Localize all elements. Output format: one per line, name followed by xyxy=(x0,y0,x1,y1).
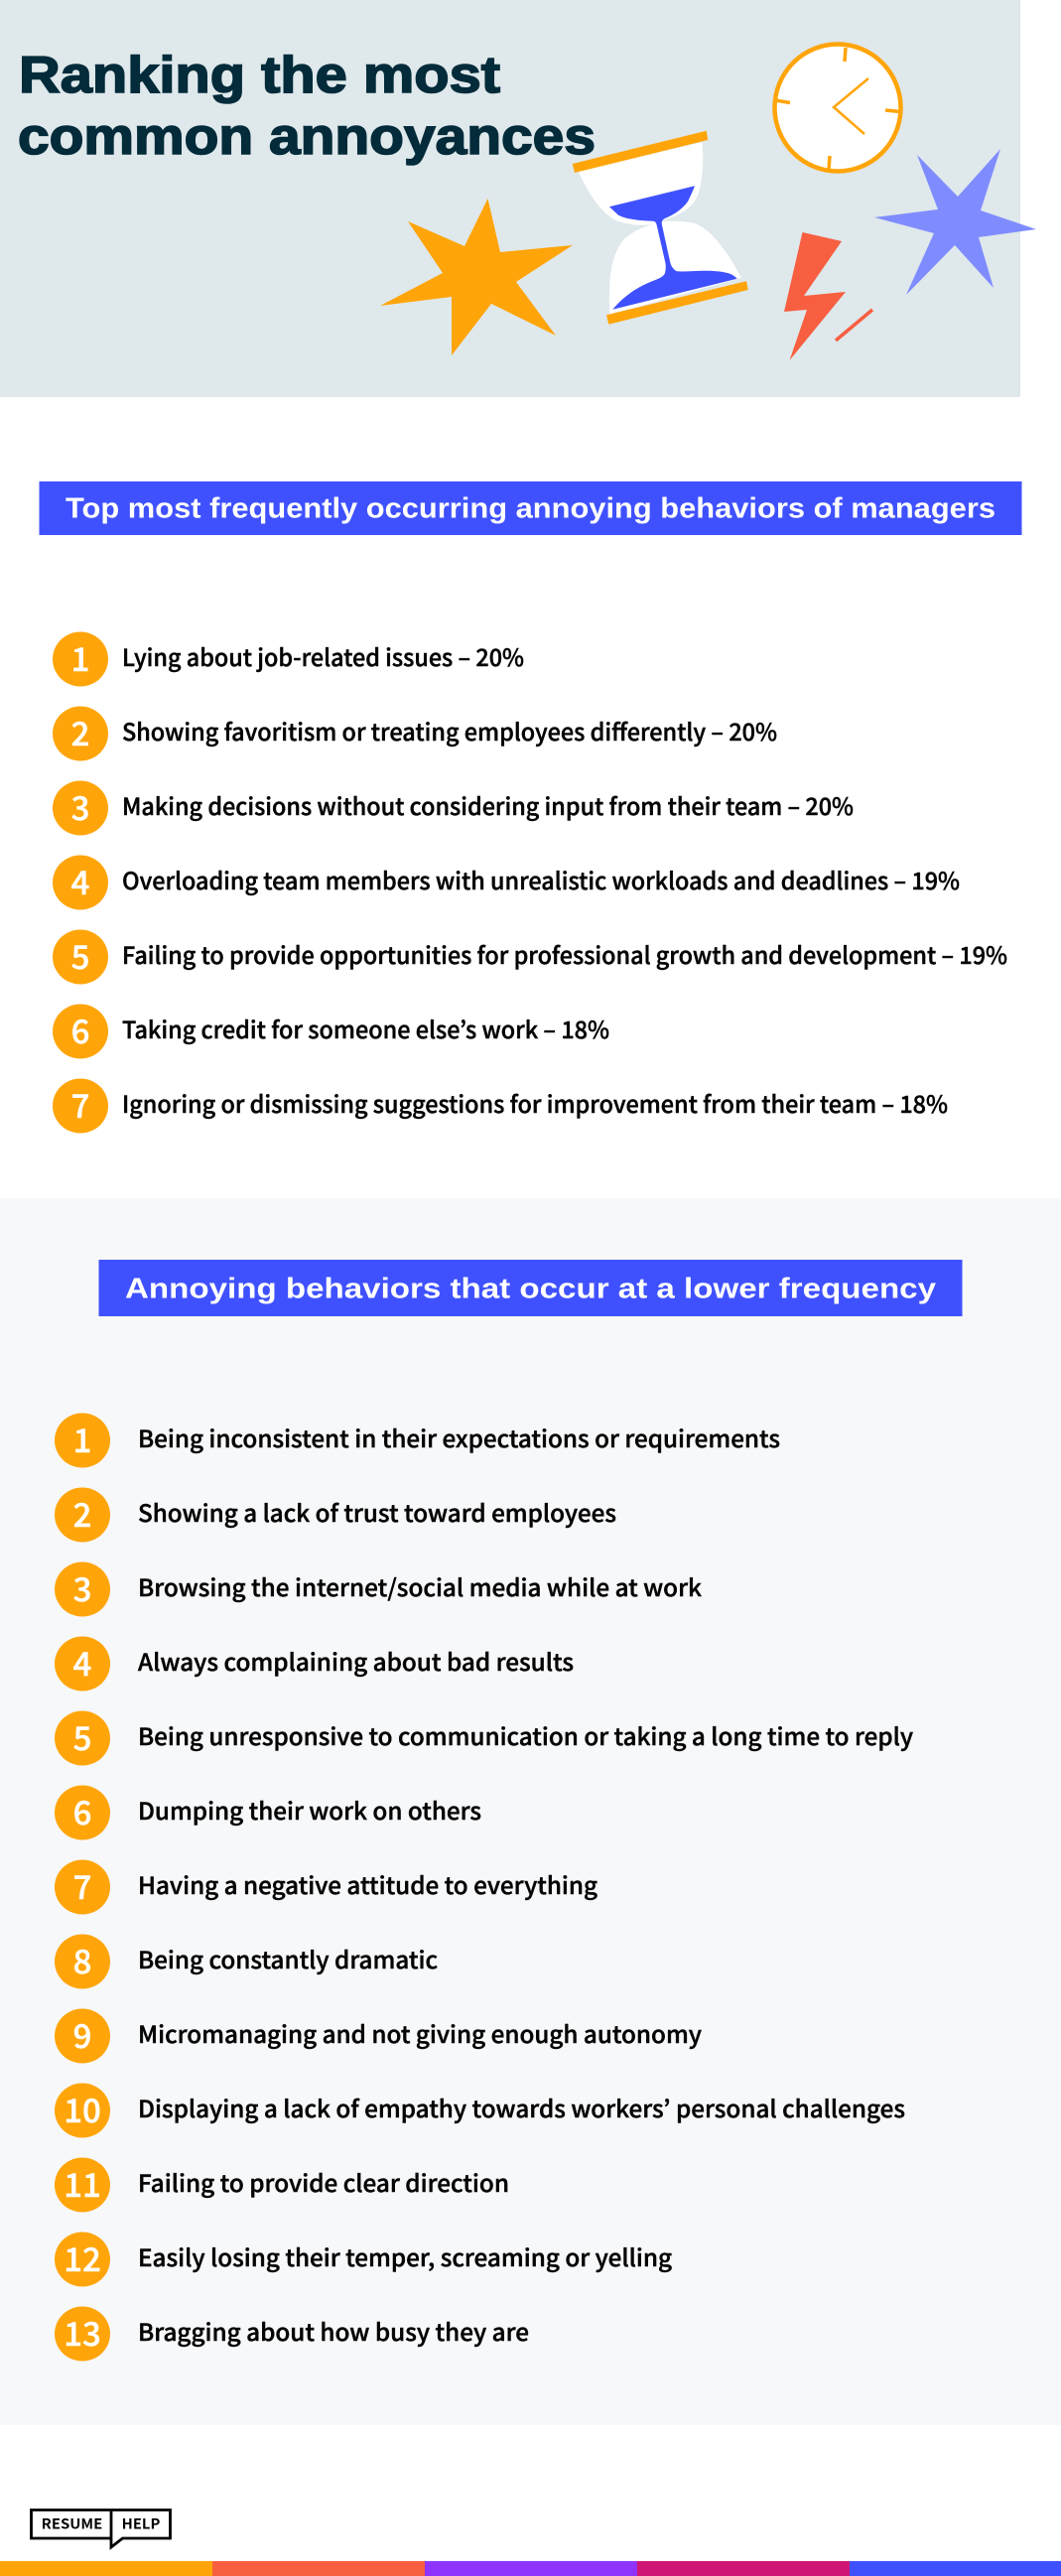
title xyxy=(18,47,596,166)
item 11: 11 xyxy=(64,2159,101,2207)
item 7: 7 xyxy=(71,1080,89,1128)
item 5: Failing to provide opportunities for professional growth and development – 19% xyxy=(122,936,1007,971)
item 10 xyxy=(55,2083,905,2138)
item 1: Lying about job-related issues – 20% xyxy=(122,638,524,673)
item 8 xyxy=(55,1934,438,1989)
item 7: Having a negative attitude to everything xyxy=(138,1866,597,1901)
icon: hourglass xyxy=(573,131,748,325)
item 11: Failing to provide clear direction xyxy=(138,2164,509,2199)
item 7: Ignoring or dismissing suggestions for improvement from their team – 18% xyxy=(122,1085,948,1120)
logo: Resume Help xyxy=(32,2509,171,2547)
item 1 xyxy=(55,1414,780,1467)
title: common annoyances xyxy=(18,108,596,166)
item 2: Showing favoritism or treating employees differently – 20% xyxy=(122,713,777,747)
item 3: Making decisions without considering input from their team – 20% xyxy=(122,787,854,822)
item 5: 5 xyxy=(71,931,89,979)
item 2: Showing a lack of trust toward employees xyxy=(138,1494,616,1529)
item 13: 13 xyxy=(64,2308,101,2356)
item 4 xyxy=(55,1636,574,1692)
item 7 xyxy=(53,1078,948,1134)
item 4: Always complaining about bad results xyxy=(138,1643,574,1678)
item 4 xyxy=(53,856,960,909)
heading: top behaviors: Top most frequently occurring annoying behaviors of managers xyxy=(66,492,995,524)
icon: clock xyxy=(774,44,901,171)
item 4: Overloading team members with unrealistic workloads and deadlines – 19% xyxy=(122,862,960,896)
item 5: Being unresponsive to communication or taking a long time to reply xyxy=(138,1717,913,1752)
item 12 xyxy=(55,2232,672,2287)
heading: lower frequency behaviors: Annoying behaviors that occur at a lower frequency xyxy=(125,1273,936,1304)
item 6: 6 xyxy=(71,1006,89,1053)
item 2 xyxy=(53,707,777,760)
item 2: 2 xyxy=(71,708,89,755)
item 6: Taking credit for someone else’s work – 18% xyxy=(122,1011,609,1045)
logo: Resume Help: HELP xyxy=(122,2514,160,2534)
item 3 xyxy=(55,1562,702,1616)
item 1: 1 xyxy=(71,633,89,681)
item 12: Easily losing their temper, screaming or yelling xyxy=(138,2238,672,2273)
item 11 xyxy=(55,2158,509,2212)
item 3: Browsing the internet/social media while at work xyxy=(138,1568,702,1603)
item 9 xyxy=(55,2009,702,2063)
panel: header xyxy=(0,0,1036,397)
item 4: 4 xyxy=(71,857,89,904)
item 8: 8 xyxy=(73,1936,91,1983)
item 6: 6 xyxy=(73,1787,91,1834)
logo: Resume Help: RESUME xyxy=(42,2514,102,2534)
item 6 xyxy=(53,1005,609,1058)
item 6: Dumping their work on others xyxy=(138,1792,481,1827)
item 7 xyxy=(55,1860,597,1914)
list: most frequent behaviors xyxy=(53,631,1007,1134)
item 13: Bragging about how busy they are xyxy=(138,2313,529,2348)
item 12: 12 xyxy=(64,2234,101,2281)
item 9: 9 xyxy=(73,2010,91,2058)
item 5 xyxy=(55,1711,913,1765)
icon: orange star xyxy=(380,199,573,355)
panel: lower frequency xyxy=(0,1198,1061,2425)
item 8: Being constantly dramatic xyxy=(138,1941,438,1975)
icon: periwinkle star xyxy=(874,149,1036,295)
item 2: 2 xyxy=(73,1489,91,1537)
item 5 xyxy=(53,929,1007,985)
item 1: 1 xyxy=(73,1415,91,1462)
item 7: 7 xyxy=(73,1861,91,1909)
heading: top behaviors xyxy=(40,481,1022,535)
item 4: 4 xyxy=(73,1638,91,1686)
icon: lightning bolt xyxy=(784,232,872,360)
item 13 xyxy=(55,2307,529,2361)
item 10: Displaying a lack of empathy towards workers’ personal challenges xyxy=(138,2090,905,2124)
item 1: Being inconsistent in their expectations or requirements xyxy=(138,1420,780,1454)
title: Ranking the most xyxy=(19,47,500,104)
footer color bar xyxy=(0,2561,1061,2576)
item 10: 10 xyxy=(64,2085,101,2132)
item 3: 3 xyxy=(71,782,89,830)
item 3 xyxy=(53,780,854,836)
item 9: Micromanaging and not giving enough autonomy xyxy=(138,2015,702,2050)
item 3: 3 xyxy=(73,1563,91,1611)
heading: lower frequency behaviors xyxy=(99,1260,963,1316)
item 1 xyxy=(53,631,524,687)
item 5: 5 xyxy=(73,1712,91,1760)
item 2 xyxy=(55,1487,616,1543)
item 6 xyxy=(55,1785,481,1840)
